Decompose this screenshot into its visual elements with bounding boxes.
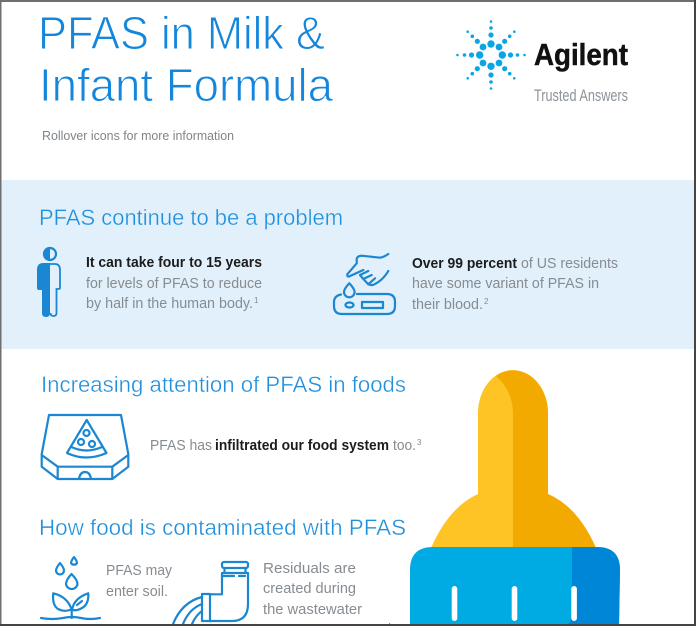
text: four to 15 years: 1 bbox=[254, 296, 259, 305]
bottle nipple bbox=[431, 370, 596, 548]
text: over 99 percent: Over 99 percent bbox=[412, 256, 517, 272]
text: residuals bbox=[263, 561, 391, 626]
text: residuals: Residuals are bbox=[263, 561, 356, 577]
logo spark bbox=[456, 20, 526, 90]
heading: attention in foods: Increasing attention of PFAS in foods bbox=[41, 372, 406, 397]
text: enter soil bbox=[106, 563, 173, 600]
illustration: baby bottle bbox=[410, 370, 620, 626]
Agilent logo bbox=[456, 20, 628, 105]
text: over 99 percent: have some variant of PFAS in bbox=[412, 276, 599, 292]
text: over 99 percent: of US residents bbox=[521, 256, 618, 272]
logo wordmark: Agilent bbox=[534, 37, 628, 72]
text: four to 15 years bbox=[86, 255, 262, 312]
heading: contamination: How food is contaminated with PFAS bbox=[39, 515, 406, 540]
icon: plant with water drops bbox=[41, 557, 100, 619]
title: Infant Formula bbox=[39, 59, 333, 111]
text: four to 15 years: for levels of PFAS to reduce bbox=[86, 276, 262, 292]
text: food system: too. bbox=[393, 438, 416, 454]
title bbox=[38, 7, 333, 111]
title: PFAS in Milk & bbox=[38, 7, 325, 59]
panel: PFAS continue to be a problem bbox=[0, 180, 696, 349]
icon: human body bbox=[37, 247, 60, 317]
text: residuals: the wastewater bbox=[263, 602, 362, 618]
text: residuals: created during bbox=[263, 581, 356, 597]
icon: wastewater pipe bbox=[173, 562, 248, 624]
text: four to 15 years: by half in the human body. bbox=[86, 296, 253, 312]
text: food system: PFAS has bbox=[150, 438, 212, 454]
icon: pizza box bbox=[42, 415, 128, 479]
text: over 99 percent bbox=[412, 256, 618, 313]
bottle body bbox=[410, 547, 620, 626]
text: over 99 percent: 2 bbox=[484, 297, 489, 306]
text: food system bbox=[150, 438, 422, 454]
text: food system: infiltrated our food system bbox=[215, 438, 389, 454]
icon: hand and blood test bbox=[334, 254, 395, 314]
text: over 99 percent: their blood. bbox=[412, 297, 483, 313]
text: enter soil: PFAS may bbox=[106, 563, 173, 579]
text: food system: 3 bbox=[417, 438, 422, 447]
text: four to 15 years: It can take four to 15 years bbox=[86, 255, 262, 271]
text: enter soil: enter soil. bbox=[106, 584, 168, 600]
logo tagline: Trusted Answers bbox=[534, 86, 628, 105]
heading: problem: PFAS continue to be a problem bbox=[39, 205, 343, 230]
instruction text: Rollover icons for more information bbox=[42, 129, 234, 143]
